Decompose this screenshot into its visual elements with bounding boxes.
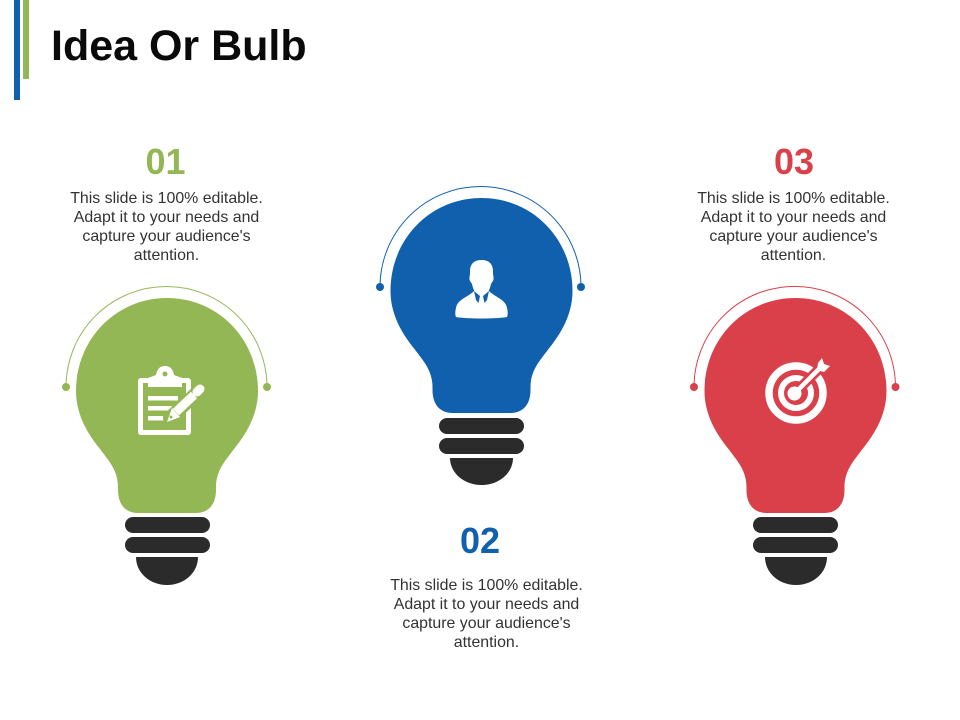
description 02: This slide is 100% editable.	[390, 577, 583, 594]
base	[125, 517, 210, 585]
accent bars	[14, 0, 29, 100]
base	[753, 517, 838, 585]
description 03: capture your audience's	[709, 228, 878, 245]
number 02: 02	[460, 520, 500, 561]
arc	[376, 186, 585, 291]
description 01: attention.	[134, 247, 199, 264]
description 03: This slide is 100% editable.	[697, 190, 890, 207]
panel: step 03 text	[697, 141, 890, 264]
number 01: 01	[145, 141, 186, 182]
description 01: capture your audience's	[82, 228, 251, 245]
icon: target	[769, 358, 830, 420]
icon: person	[455, 260, 508, 318]
description 01: Adapt it to your needs and	[74, 209, 259, 226]
arc	[690, 286, 900, 391]
description 02: attention.	[454, 634, 519, 651]
panel: step 01 text	[70, 141, 263, 264]
number 03: 03	[774, 141, 814, 182]
bulb: red	[690, 286, 900, 585]
arc	[62, 286, 271, 391]
glass	[76, 298, 258, 513]
bulb: blue	[376, 186, 585, 485]
title: Idea Or Bulb	[51, 22, 307, 70]
description 02: capture your audience's	[402, 615, 571, 632]
panel: step 02 text	[390, 520, 583, 651]
description 01: This slide is 100% editable.	[70, 190, 263, 207]
base	[439, 418, 524, 485]
description 03: Adapt it to your needs and	[701, 209, 886, 226]
description 03: attention.	[761, 247, 826, 264]
glass	[704, 298, 886, 513]
icon: clipboard and pencil	[138, 366, 200, 435]
bulb: green	[62, 286, 271, 585]
glass	[390, 198, 572, 413]
description 02: Adapt it to your needs and	[394, 596, 579, 613]
